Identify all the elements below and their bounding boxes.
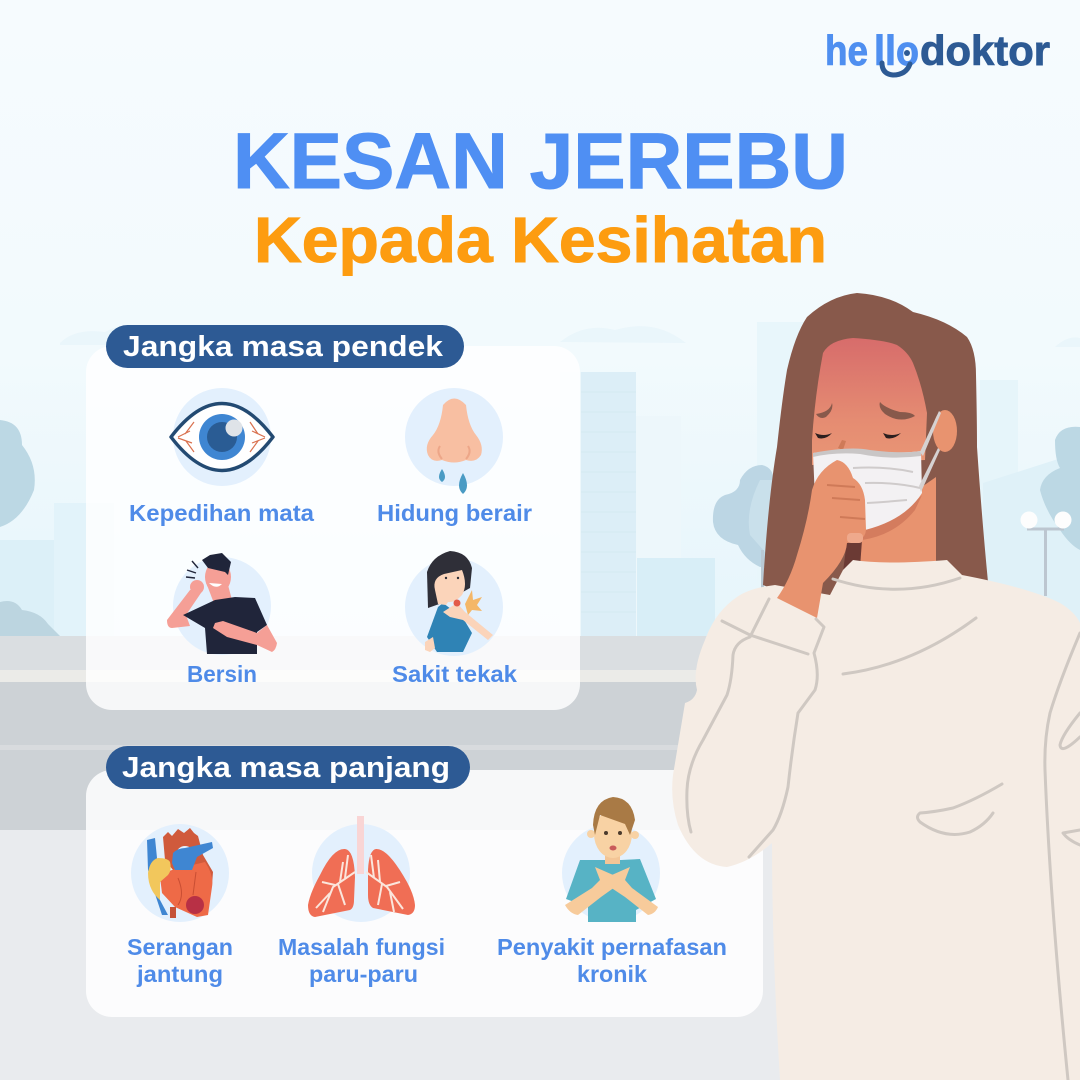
shadow under chin (862, 495, 922, 540)
icon: heart attack (131, 824, 229, 922)
label: Serangan jantung (127, 934, 233, 987)
logo: hellodoktor: doktor (920, 27, 1050, 74)
sweater fold lines (687, 578, 1080, 1080)
label: Bersin: Bersin (187, 661, 257, 687)
icon: sneezing man (167, 553, 277, 655)
face (812, 338, 927, 465)
panel: long term (86, 770, 763, 1017)
logo: hellodoktor: he (825, 27, 868, 74)
trees (0, 420, 35, 527)
icon: lungs (308, 816, 415, 922)
heading pill: Jangka masa pendek: Jangka masa pendek (123, 331, 444, 363)
icon: red irritated eye (171, 388, 273, 486)
label: Masalah fungsi paru-paru (278, 934, 445, 987)
icon: runny nose (405, 388, 503, 494)
label: Penyakit pernafasan kronik (497, 934, 727, 987)
label: Serangan jantung: jantung (136, 961, 223, 987)
label: Masalah fungsi paru-paru: Masalah fungsi (278, 934, 445, 960)
heading pill: Jangka masa panjang (106, 746, 470, 789)
eyebrows (816, 402, 915, 420)
label: Penyakit pernafasan kronik: Penyakit pernafasan (497, 934, 727, 960)
heading pill: Jangka masa panjang: Jangka masa panjang (122, 752, 450, 784)
label: Penyakit pernafasan kronik: kronik (577, 961, 647, 987)
sweater (672, 560, 1080, 1080)
label: Kepedihan mata: Kepedihan mata (129, 500, 314, 526)
logo: hellodoktor: ll (874, 27, 896, 74)
logo: hellodoktor (825, 27, 1050, 75)
logo: hellodoktor: o (896, 27, 919, 74)
heading pill: Jangka masa pendek (106, 325, 464, 368)
label: Masalah fungsi paru-paru: paru-paru (309, 961, 418, 987)
finger lines (827, 485, 865, 519)
hand and forearm (777, 460, 866, 618)
nose (838, 440, 846, 450)
illustration: woman coughing with face mask (672, 293, 1080, 1080)
closed eyes (815, 433, 901, 438)
label: Hidung berair: Hidung berair (377, 500, 532, 526)
neck (850, 477, 936, 575)
label: Serangan jantung: Serangan (127, 934, 233, 960)
title: KESAN JEREBU (233, 116, 848, 205)
label: Sakit tekak: Sakit tekak (392, 661, 517, 687)
hair (763, 293, 988, 600)
mask (813, 450, 922, 530)
panel: short term (86, 346, 580, 710)
icon: woman with sore throat (405, 551, 503, 656)
subtitle: Kepada Kesihatan (254, 204, 827, 276)
ear (933, 410, 957, 452)
icon: man with chronic breathing problem (562, 797, 660, 922)
